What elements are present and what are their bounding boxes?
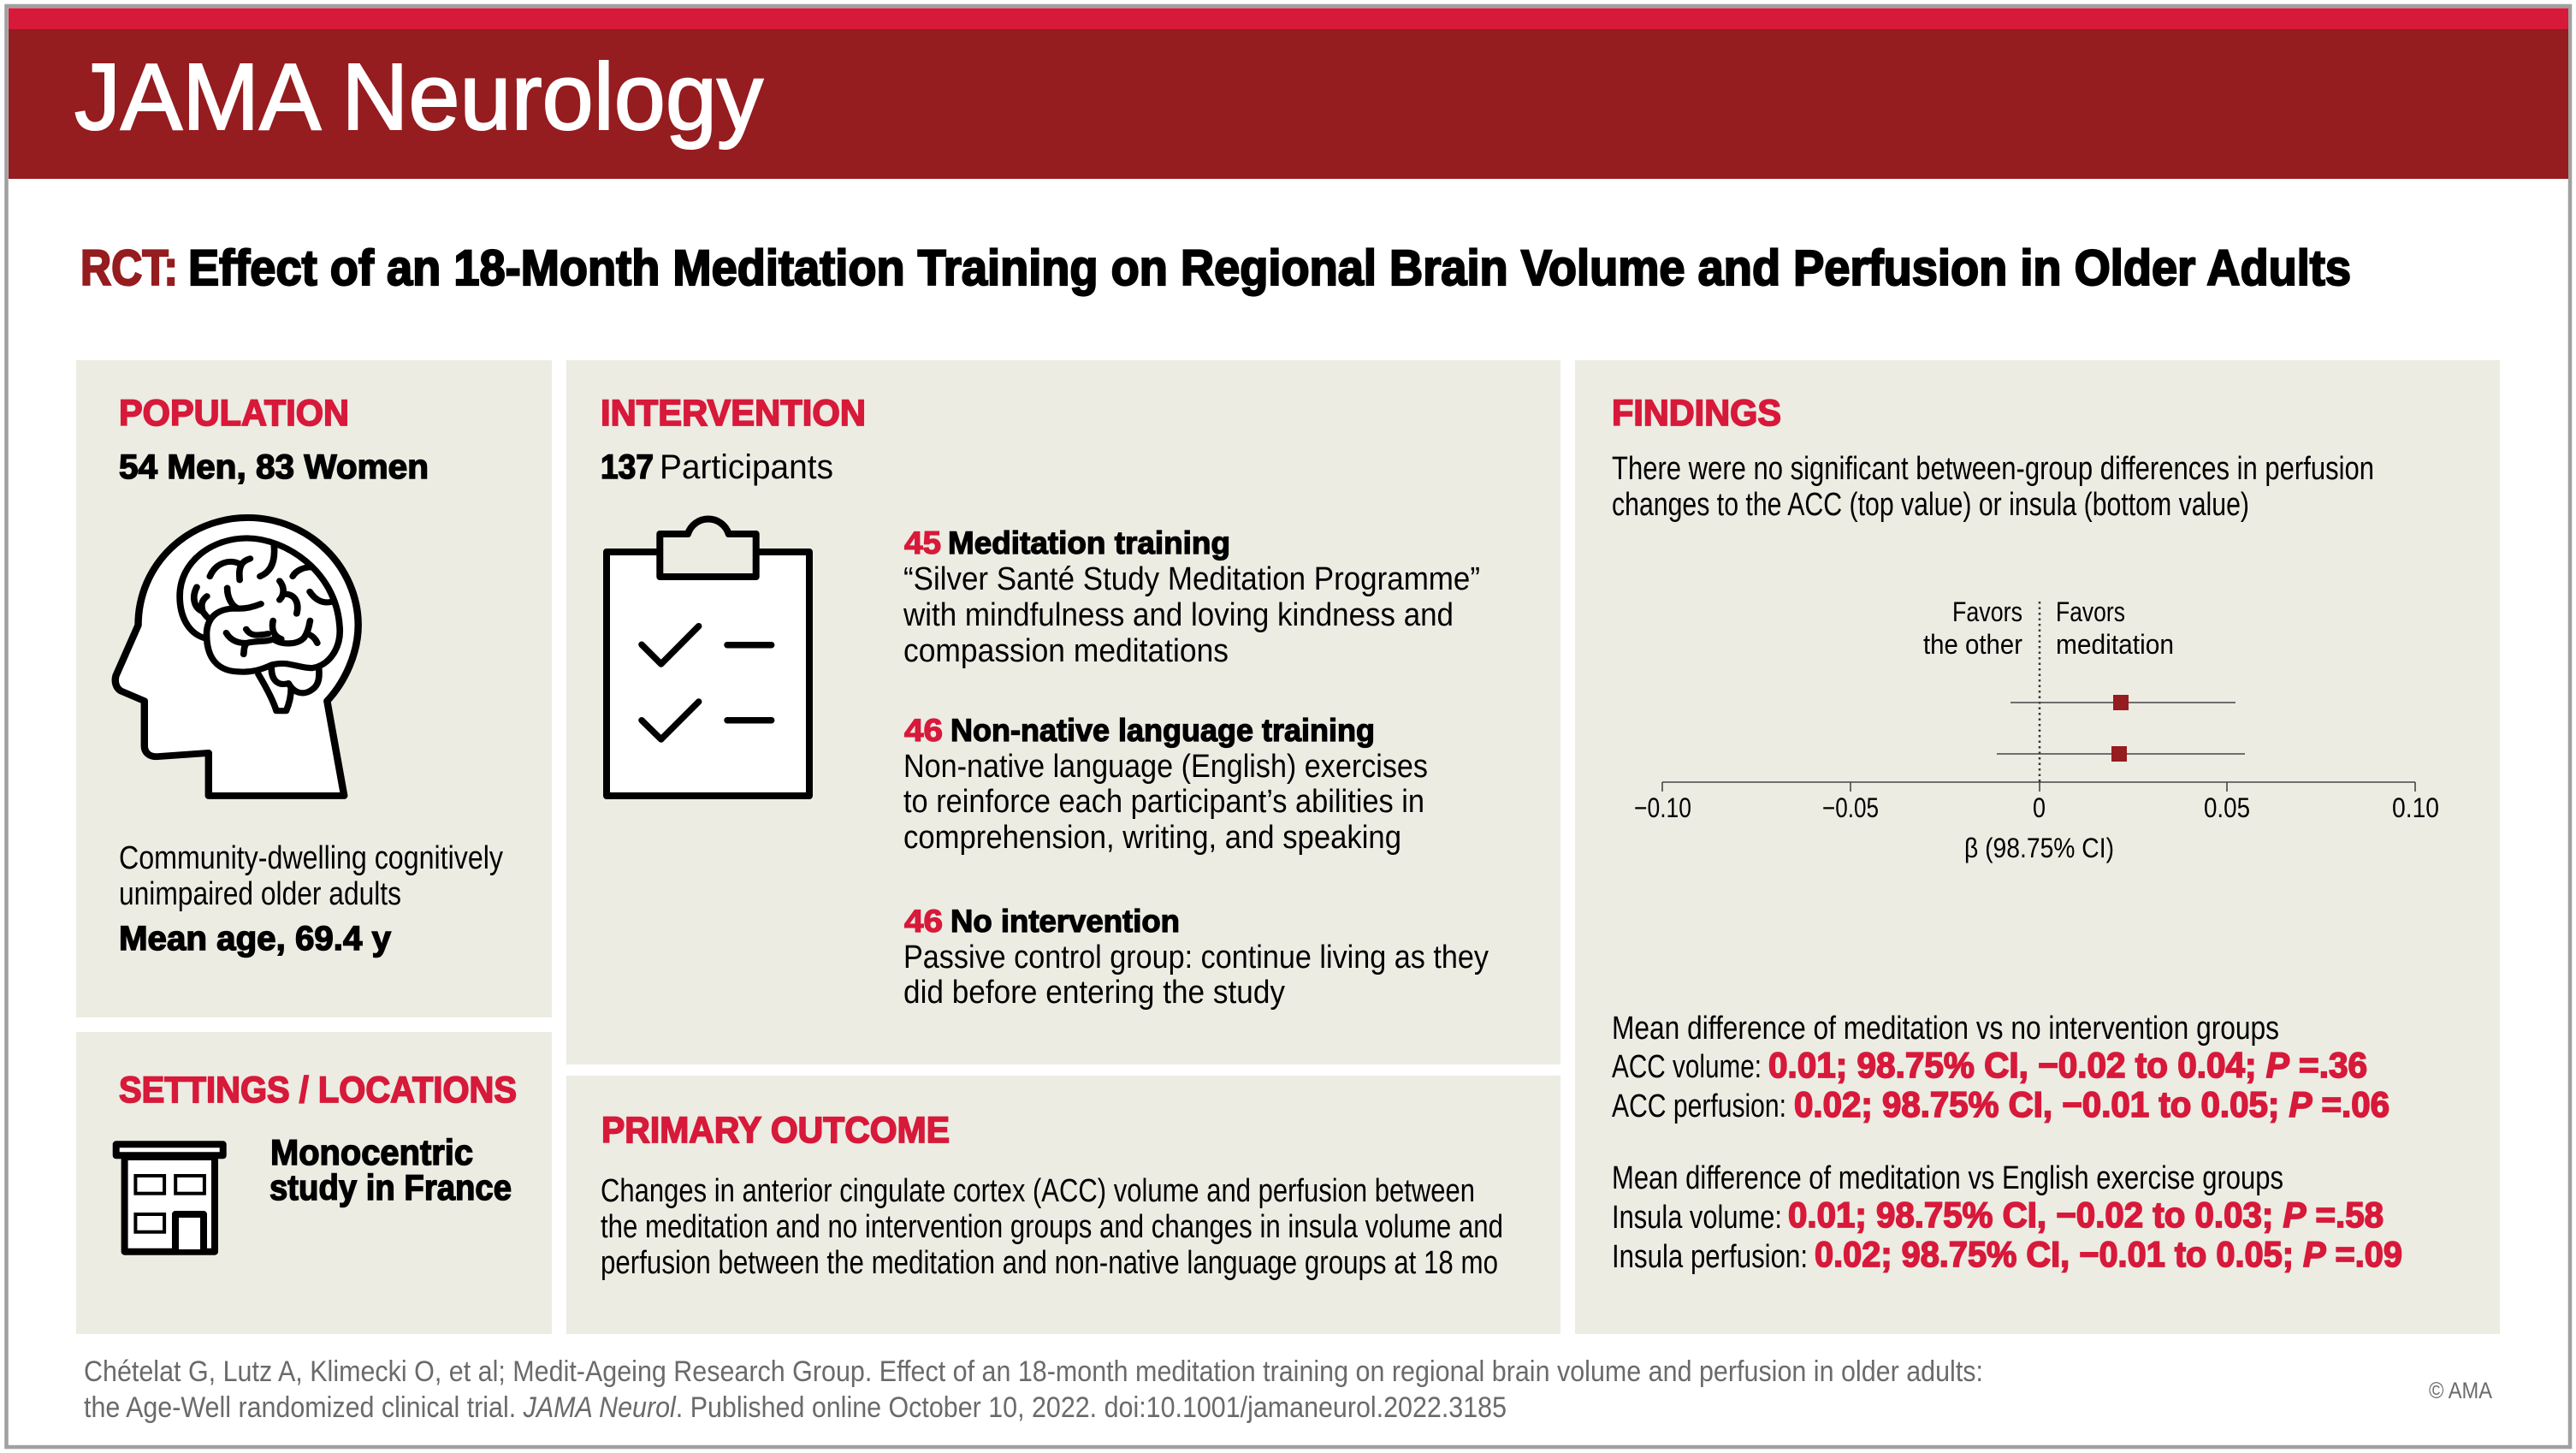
heading: findings: FINDINGS bbox=[1612, 393, 1781, 434]
outcome description: the meditation and no intervention groups and changes in insula volume and bbox=[601, 1209, 1503, 1245]
findings summary bbox=[1612, 451, 2374, 523]
results: meditation vs English exercise: Insula perfusion: bbox=[1612, 1239, 1808, 1275]
favors labels: the other bbox=[1923, 629, 2022, 660]
panel: population bbox=[76, 360, 552, 1017]
results: meditation vs English exercise: Insula volume: bbox=[1612, 1200, 1782, 1236]
mean age: Mean age, 69.4 y bbox=[119, 920, 392, 958]
arm: meditation training bbox=[903, 525, 1480, 669]
outcome description: Changes in anterior cingulate cortex (ACC) volume and perfusion between bbox=[601, 1173, 1475, 1209]
axis tick labels: 0.10 bbox=[2392, 792, 2439, 823]
population description: unimpaired older adults bbox=[119, 876, 401, 912]
outcome description bbox=[601, 1173, 1503, 1281]
title: RCT: bbox=[80, 240, 178, 296]
arm: meditation training: “Silver Santé Study Meditation Programme” bbox=[903, 561, 1480, 597]
arm: meditation training: with mindfulness and loving kindness and bbox=[903, 597, 1454, 633]
forest plot bbox=[1634, 596, 2439, 863]
results: meditation vs English exercise: 0.01; 98.75% CI, −0.02 to 0.03; P =.58 bbox=[1788, 1195, 2384, 1235]
results: meditation vs no intervention: ACC volume: bbox=[1612, 1049, 1762, 1085]
heading: settings: SETTINGS / LOCATIONS bbox=[119, 1070, 517, 1111]
findings summary: changes to the ACC (top value) or insula (bottom value) bbox=[1612, 487, 2249, 523]
journal name: JAMA Neurology bbox=[74, 44, 763, 150]
population description: Community-dwelling cognitively bbox=[119, 840, 503, 876]
favors labels: Favors bbox=[2056, 596, 2125, 627]
results: meditation vs English exercise: Mean difference of meditation vs English exercise groups bbox=[1612, 1160, 2283, 1196]
participants total: Participants bbox=[660, 448, 833, 486]
arm: non-native language training: Non-native language (English) exercises bbox=[903, 749, 1428, 785]
results: meditation vs English exercise bbox=[1612, 1160, 2402, 1275]
citation: Chételat G, Lutz A, Klimecki O, et al; Medit-Ageing Research Group. Effect of an 18-month meditation training on regional brain volume and perfusion in older adults: bbox=[84, 1355, 1983, 1388]
favors labels: meditation bbox=[2056, 629, 2174, 660]
citation bbox=[84, 1355, 1983, 1424]
citation: the Age-Well randomized clinical trial. JAMA Neurol. Published online October 10, 2022. doi:10.1001/jamaneurol.2022.3185 bbox=[84, 1391, 1507, 1424]
study setting bbox=[269, 1132, 512, 1207]
arm: non-native language training: 46 bbox=[904, 713, 943, 748]
panel: settings and locations bbox=[76, 1032, 552, 1334]
findings summary: There were no significant between-group differences in perfusion bbox=[1612, 451, 2374, 487]
heading: population: POPULATION bbox=[119, 393, 349, 434]
arm: non-native language training: Non-native language training bbox=[950, 713, 1375, 748]
arm: meditation training: compassion meditations bbox=[903, 633, 1229, 669]
results: meditation vs no intervention: Mean difference of meditation vs no intervention groups bbox=[1612, 1011, 2279, 1047]
axis title: β (98.75% CI) bbox=[1964, 833, 2114, 863]
results: meditation vs no intervention: 0.01; 98.75% CI, −0.02 to 0.04; P =.36 bbox=[1768, 1045, 2367, 1085]
icon: building bbox=[116, 1144, 223, 1252]
axis tick labels bbox=[1634, 792, 2439, 823]
estimate: ACC perfusion bbox=[2010, 695, 2235, 710]
title: Effect of an 18-Month Meditation Training on Regional Brain Volume and Perfusion in Older Adults bbox=[188, 240, 2351, 296]
arm: non-native language training: to reinforce each participant’s abilities in bbox=[903, 784, 1424, 820]
arm: no intervention: 46 bbox=[904, 904, 943, 939]
icon: head with brain bbox=[115, 518, 358, 796]
results: meditation vs no intervention: 0.02; 98.75% CI, −0.01 to 0.05; P =.06 bbox=[1794, 1084, 2389, 1124]
arm: no intervention: Passive control group: continue living as they bbox=[903, 940, 1489, 976]
axis tick labels: 0 bbox=[2033, 792, 2046, 823]
axis tick labels: −0.10 bbox=[1634, 792, 1691, 823]
arm: meditation training: 45 bbox=[904, 525, 941, 560]
results: meditation vs no intervention: ACC perfusion: bbox=[1612, 1088, 1786, 1124]
arm: no intervention: No intervention bbox=[950, 904, 1180, 939]
population description bbox=[119, 840, 503, 912]
axis tick labels: −0.05 bbox=[1822, 792, 1879, 823]
arm: non-native language training: comprehension, writing, and speaking bbox=[903, 820, 1401, 856]
panel: primary outcome bbox=[566, 1076, 1560, 1334]
panel: intervention bbox=[566, 360, 1560, 1065]
participants total: 137 bbox=[601, 448, 654, 486]
results: meditation vs no intervention bbox=[1612, 1011, 2389, 1124]
study setting: study in France bbox=[269, 1167, 512, 1207]
favors labels: Favors bbox=[1952, 596, 2022, 627]
heading: intervention: INTERVENTION bbox=[601, 393, 866, 434]
estimate: insula perfusion bbox=[1997, 746, 2245, 762]
icon: clipboard checklist bbox=[607, 519, 809, 796]
heading: primary outcome: PRIMARY OUTCOME bbox=[601, 1110, 950, 1151]
header banner bbox=[9, 9, 2568, 179]
arm: meditation training: Meditation training bbox=[948, 525, 1230, 560]
arm: no intervention: did before entering the study bbox=[903, 975, 1285, 1011]
study setting: Monocentric bbox=[270, 1132, 473, 1172]
arm: non-native language training bbox=[903, 713, 1428, 856]
participant counts: 54 Men, 83 Women bbox=[119, 448, 429, 486]
results: meditation vs English exercise: 0.02; 98.75% CI, −0.01 to 0.05; P =.09 bbox=[1815, 1234, 2402, 1274]
panel: findings bbox=[1575, 360, 2500, 1334]
copyright: © AMA bbox=[2429, 1378, 2492, 1403]
favors labels bbox=[1923, 596, 2174, 660]
outcome description: perfusion between the meditation and non-native language groups at 18 mo bbox=[601, 1245, 1498, 1281]
axis tick labels: 0.05 bbox=[2204, 792, 2250, 823]
arm: no intervention bbox=[903, 904, 1489, 1011]
